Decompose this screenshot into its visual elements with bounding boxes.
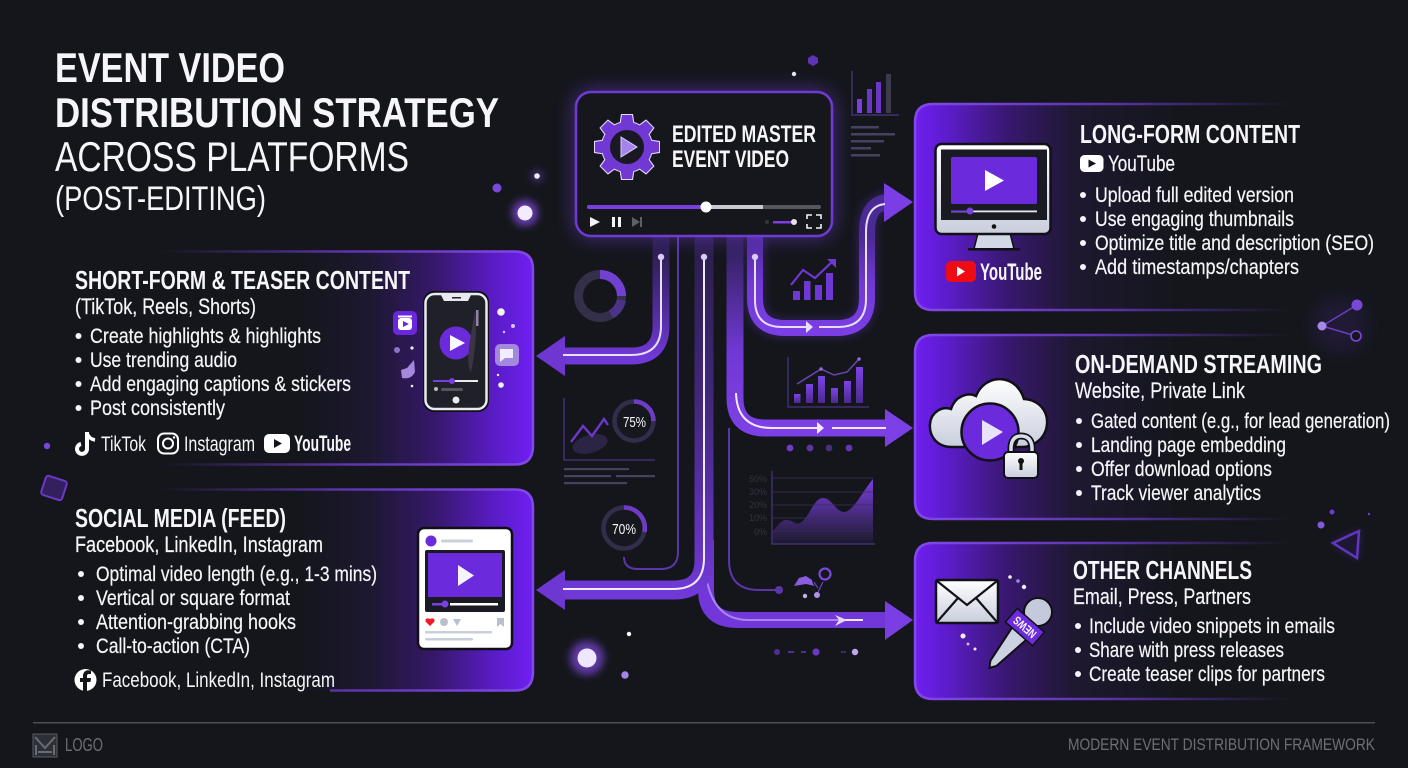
icon: news microphone: NEWS [1010, 613, 1039, 641]
subheading: Email, Press, Partners [1073, 584, 1251, 609]
title: EVENT VIDEO [55, 44, 285, 91]
heading: SOCIAL MEDIA (FEED) [75, 503, 286, 533]
thin connector left [624, 237, 678, 569]
video player controls [587, 202, 821, 228]
platform row: Facebook, LinkedIn, Instagram [102, 668, 335, 692]
panel: short-form and teaser content [40, 252, 533, 464]
panel: edited master event video [575, 91, 833, 237]
subheading with icon: YouTube [1108, 151, 1175, 176]
heading: LONG-FORM CONTENT [1080, 119, 1300, 149]
small decorative dots top [792, 55, 818, 76]
platform row: YouTube [294, 431, 351, 456]
bullet list: Post consistently [90, 396, 225, 420]
bullet list: Attention-grabbing hooks [96, 610, 296, 634]
bullet list: Landing page embedding [1091, 433, 1286, 457]
icon: gear with play [594, 114, 660, 180]
bullet list: Add engaging captions & stickers [90, 372, 351, 396]
bullet list: Offer download options [1091, 457, 1272, 481]
heading: SHORT-FORM & TEASER CONTENT [75, 265, 410, 295]
arrow: to on-demand streaming [735, 237, 913, 447]
area chart [749, 471, 875, 544]
mini bar chart top [851, 71, 899, 156]
bullet list: Vertical or square format [96, 586, 290, 610]
bar and line chart [788, 357, 869, 407]
title: DISTRIBUTION STRATEGY [55, 89, 499, 136]
subheading with icon [1080, 151, 1175, 176]
network icon right [1312, 297, 1368, 353]
bullet list: Upload full edited version [1095, 183, 1294, 207]
panel: other channels [915, 543, 1335, 699]
arrow: to other channels [705, 540, 913, 640]
icon: envelope [936, 580, 998, 623]
subheading: Website, Private Link [1075, 378, 1246, 403]
panel: long-form content [915, 104, 1374, 310]
dots and dashes row [774, 648, 858, 656]
map pin glyphs [775, 568, 830, 598]
decorative glowing dots near title [492, 170, 543, 226]
bullet list [1075, 614, 1335, 686]
icon: desktop monitor [936, 144, 1050, 250]
icon: phone with play [393, 291, 519, 412]
area chart: 10% [749, 513, 767, 523]
bullet list [78, 562, 377, 658]
subheading: (TikTok, Reels, Shorts) [75, 294, 256, 319]
area chart: 20% [749, 500, 767, 510]
footer logo: LOGO [65, 735, 103, 755]
70% ring [604, 507, 645, 548]
logo: YouTube: YouTube [980, 259, 1042, 286]
panel: social media feed [40, 490, 533, 692]
chart with 75% ring [564, 398, 655, 484]
arrow: to long-form content [752, 183, 913, 333]
bullet list: Optimal video length (e.g., 1-3 mins) [96, 562, 377, 586]
bullet list: Add timestamps/chapters [1095, 255, 1299, 279]
bullet list: Create teaser clips for partners [1089, 662, 1325, 686]
triangle decoration right [1318, 510, 1370, 560]
logo: YouTube [946, 259, 1042, 286]
heading: EVENT VIDEO [672, 146, 789, 173]
bullet list: Track viewer analytics [1091, 481, 1261, 505]
bullet list: Create highlights & highlights [90, 324, 321, 348]
bullet list: Include video snippets in emails [1089, 614, 1335, 638]
icon: social post with video [418, 528, 512, 649]
platform row: Instagram [184, 433, 255, 456]
bullet list: Share with press releases [1089, 638, 1284, 662]
footer divider [33, 722, 1375, 724]
area chart: 0% [754, 527, 767, 537]
bullet list: Use trending audio [90, 348, 237, 372]
heading: EDITED MASTER [672, 121, 816, 148]
bullet list [1076, 409, 1390, 505]
heading: OTHER CHANNELS [1073, 555, 1252, 585]
thin connector right [729, 428, 778, 590]
area chart: 50% [749, 474, 767, 484]
title: (POST-EDITING) [55, 180, 266, 218]
decorative glowing dots bottom centre [570, 632, 631, 679]
footer logo [33, 734, 103, 757]
icon: cloud with play and lock [930, 379, 1047, 478]
platform row [77, 431, 351, 456]
70% ring: 70% [612, 521, 636, 538]
heading [672, 121, 816, 173]
icon: news microphone [960, 575, 1061, 680]
arrow: to short-form content [536, 237, 664, 376]
bullet list: Use engaging thumbnails [1095, 207, 1294, 231]
bullet list [1080, 183, 1374, 279]
subheading: Facebook, LinkedIn, Instagram [75, 532, 323, 557]
bullet list: Call-to-action (CTA) [96, 634, 250, 658]
decorative shape left [40, 443, 68, 501]
bullet list [76, 324, 351, 420]
chart with 75% ring: 75% [623, 415, 646, 431]
donut chart [578, 274, 622, 318]
platform row: TikTok [101, 433, 146, 456]
title: ACROSS PLATFORMS [55, 133, 409, 180]
panel: on-demand streaming [915, 335, 1390, 519]
heading: ON-DEMAND STREAMING [1075, 349, 1322, 379]
arrow: to social media [536, 237, 707, 610]
dots row [787, 445, 852, 451]
chart icon: rising bars [791, 259, 836, 300]
title [55, 44, 499, 218]
area chart: 30% [749, 487, 767, 497]
